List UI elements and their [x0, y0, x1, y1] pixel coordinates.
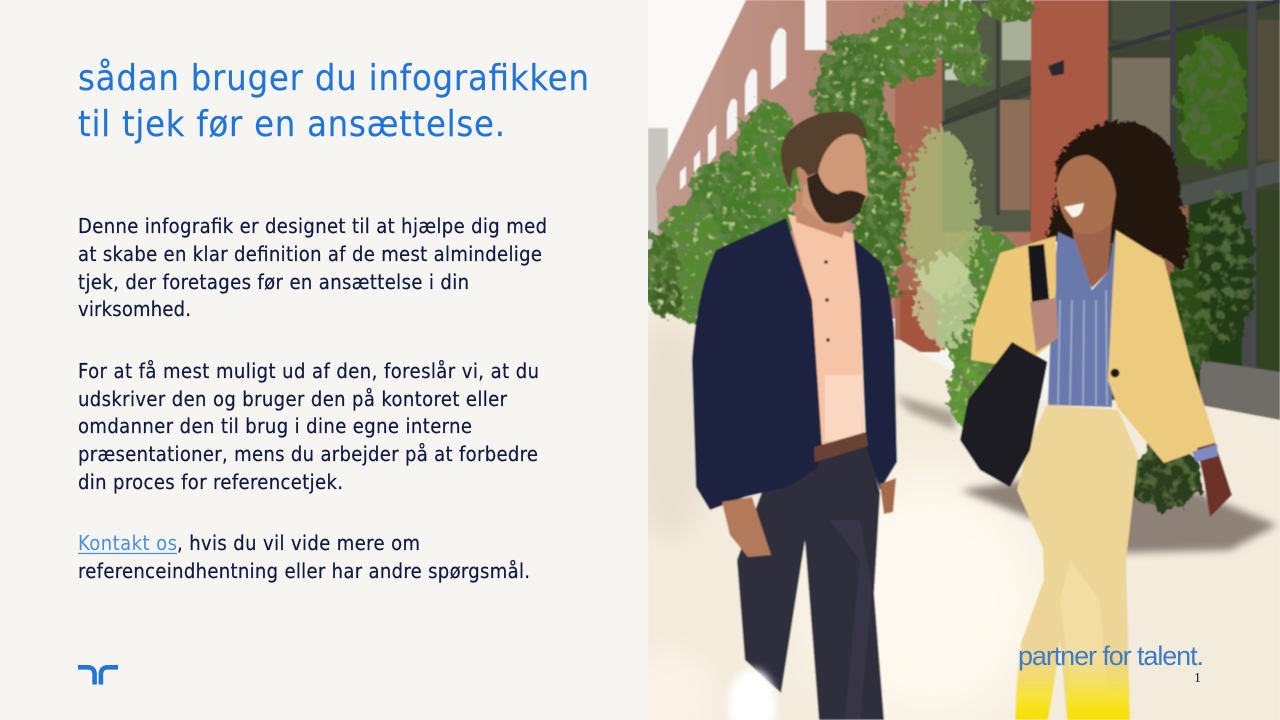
text block: intro paragraph: Denne infografik er designet til at hjælpe dig med: [78, 214, 547, 238]
man shirt buttons: [824, 260, 830, 342]
man right jacket panel: [850, 236, 897, 490]
hedge near woman's hand: [1127, 446, 1203, 510]
man hair: [781, 111, 868, 190]
man hands: [722, 497, 771, 557]
man face: [802, 130, 868, 225]
security camera: [1048, 60, 1064, 76]
woman bag strap: [1028, 244, 1052, 332]
text block: contact paragraph: referenceindhentning eller har andre spørgsmål.: [78, 559, 530, 583]
text block: usage paragraph: din proces for referencetjek.: [78, 470, 343, 494]
panel: text background: [0, 0, 648, 720]
woman shirt cuff: [1192, 444, 1218, 462]
tagline: partner for talent: partner for talent.: [1018, 641, 1204, 671]
page number: 1: [1194, 671, 1201, 686]
text block: intro paragraph: [78, 214, 547, 321]
text block: intro paragraph: at skabe en klar definition af de mest almindelige: [78, 242, 542, 266]
foliage in right windows: [1168, 34, 1253, 376]
text block: contact paragraph: [78, 531, 530, 583]
bush behind woman: [948, 356, 988, 428]
man shirt lower highlight: [825, 375, 862, 441]
text block: contact paragraph: , hvis du vil vide mere om: [177, 531, 420, 555]
text block: usage paragraph: præsentationer, mens du arbejder på at forbedre: [78, 442, 538, 466]
pavement sunlight: [810, 470, 1050, 720]
glass windows centre: [942, 0, 1031, 232]
text block: intro paragraph: virksomhed.: [78, 297, 191, 321]
photo: two colleagues walking outside a brick building: [625, 0, 1280, 720]
text block: usage paragraph: For at få mest muligt ud af den, foreslår vi, at du: [78, 359, 539, 383]
text block: usage paragraph: udskriver den og bruger den på kontoret eller: [78, 387, 508, 411]
man beard: [807, 172, 866, 224]
title: [78, 58, 589, 145]
glass windows right: [1108, 0, 1280, 415]
title: sådan bruger du infografikken: [78, 58, 589, 99]
man belt: [814, 432, 868, 462]
woman bag: [960, 342, 1047, 487]
man shirt: [788, 214, 864, 447]
woman face: [1056, 155, 1116, 234]
woman smile: [1064, 203, 1084, 217]
text block: intro paragraph: tjek, der foretages før en ansættelse i din: [78, 270, 469, 294]
man trouser fold: [830, 520, 872, 720]
man neck: [796, 190, 850, 238]
woman shoes highlight: [1015, 650, 1130, 720]
woman blazer left: [971, 236, 1056, 368]
distant building: [648, 128, 668, 258]
woman trouser highlight: [1060, 562, 1104, 666]
woman right hand: [1197, 443, 1232, 517]
text block: usage paragraph: [78, 359, 539, 494]
woman shirt: [1048, 228, 1116, 407]
white flare bottom left: [728, 669, 776, 720]
woman hair: [1046, 122, 1190, 270]
woman jacket button: [1110, 368, 1120, 378]
woman: [960, 122, 1232, 720]
woman hand holding strap: [1030, 298, 1058, 352]
title: til tjek før en ansættelse.: [78, 104, 505, 145]
man ear: [796, 166, 810, 184]
text block: contact paragraph: Kontakt os: [78, 531, 177, 555]
brick building wall: [656, 0, 1108, 352]
ground pavement: [648, 310, 1280, 720]
man trousers: [737, 445, 884, 720]
man left jacket panel: [692, 218, 824, 510]
window base right: [1200, 360, 1280, 420]
woman shirt stripes: [1058, 290, 1107, 405]
icon: company logo: [78, 667, 118, 684]
ground shadows: [895, 395, 1277, 553]
foliage climbing the wall: [640, 0, 1036, 381]
light wispy plant: [906, 130, 978, 346]
pavement left tone: [648, 334, 696, 526]
arched wall windows: [680, 0, 826, 190]
woman neck: [1072, 218, 1112, 288]
woman blazer right: [1108, 230, 1217, 463]
woman trousers: [1015, 405, 1138, 720]
sky: [648, 0, 1104, 322]
man: [692, 111, 897, 720]
text block: usage paragraph: omdanner den til brug i dine egne interne: [78, 414, 472, 438]
